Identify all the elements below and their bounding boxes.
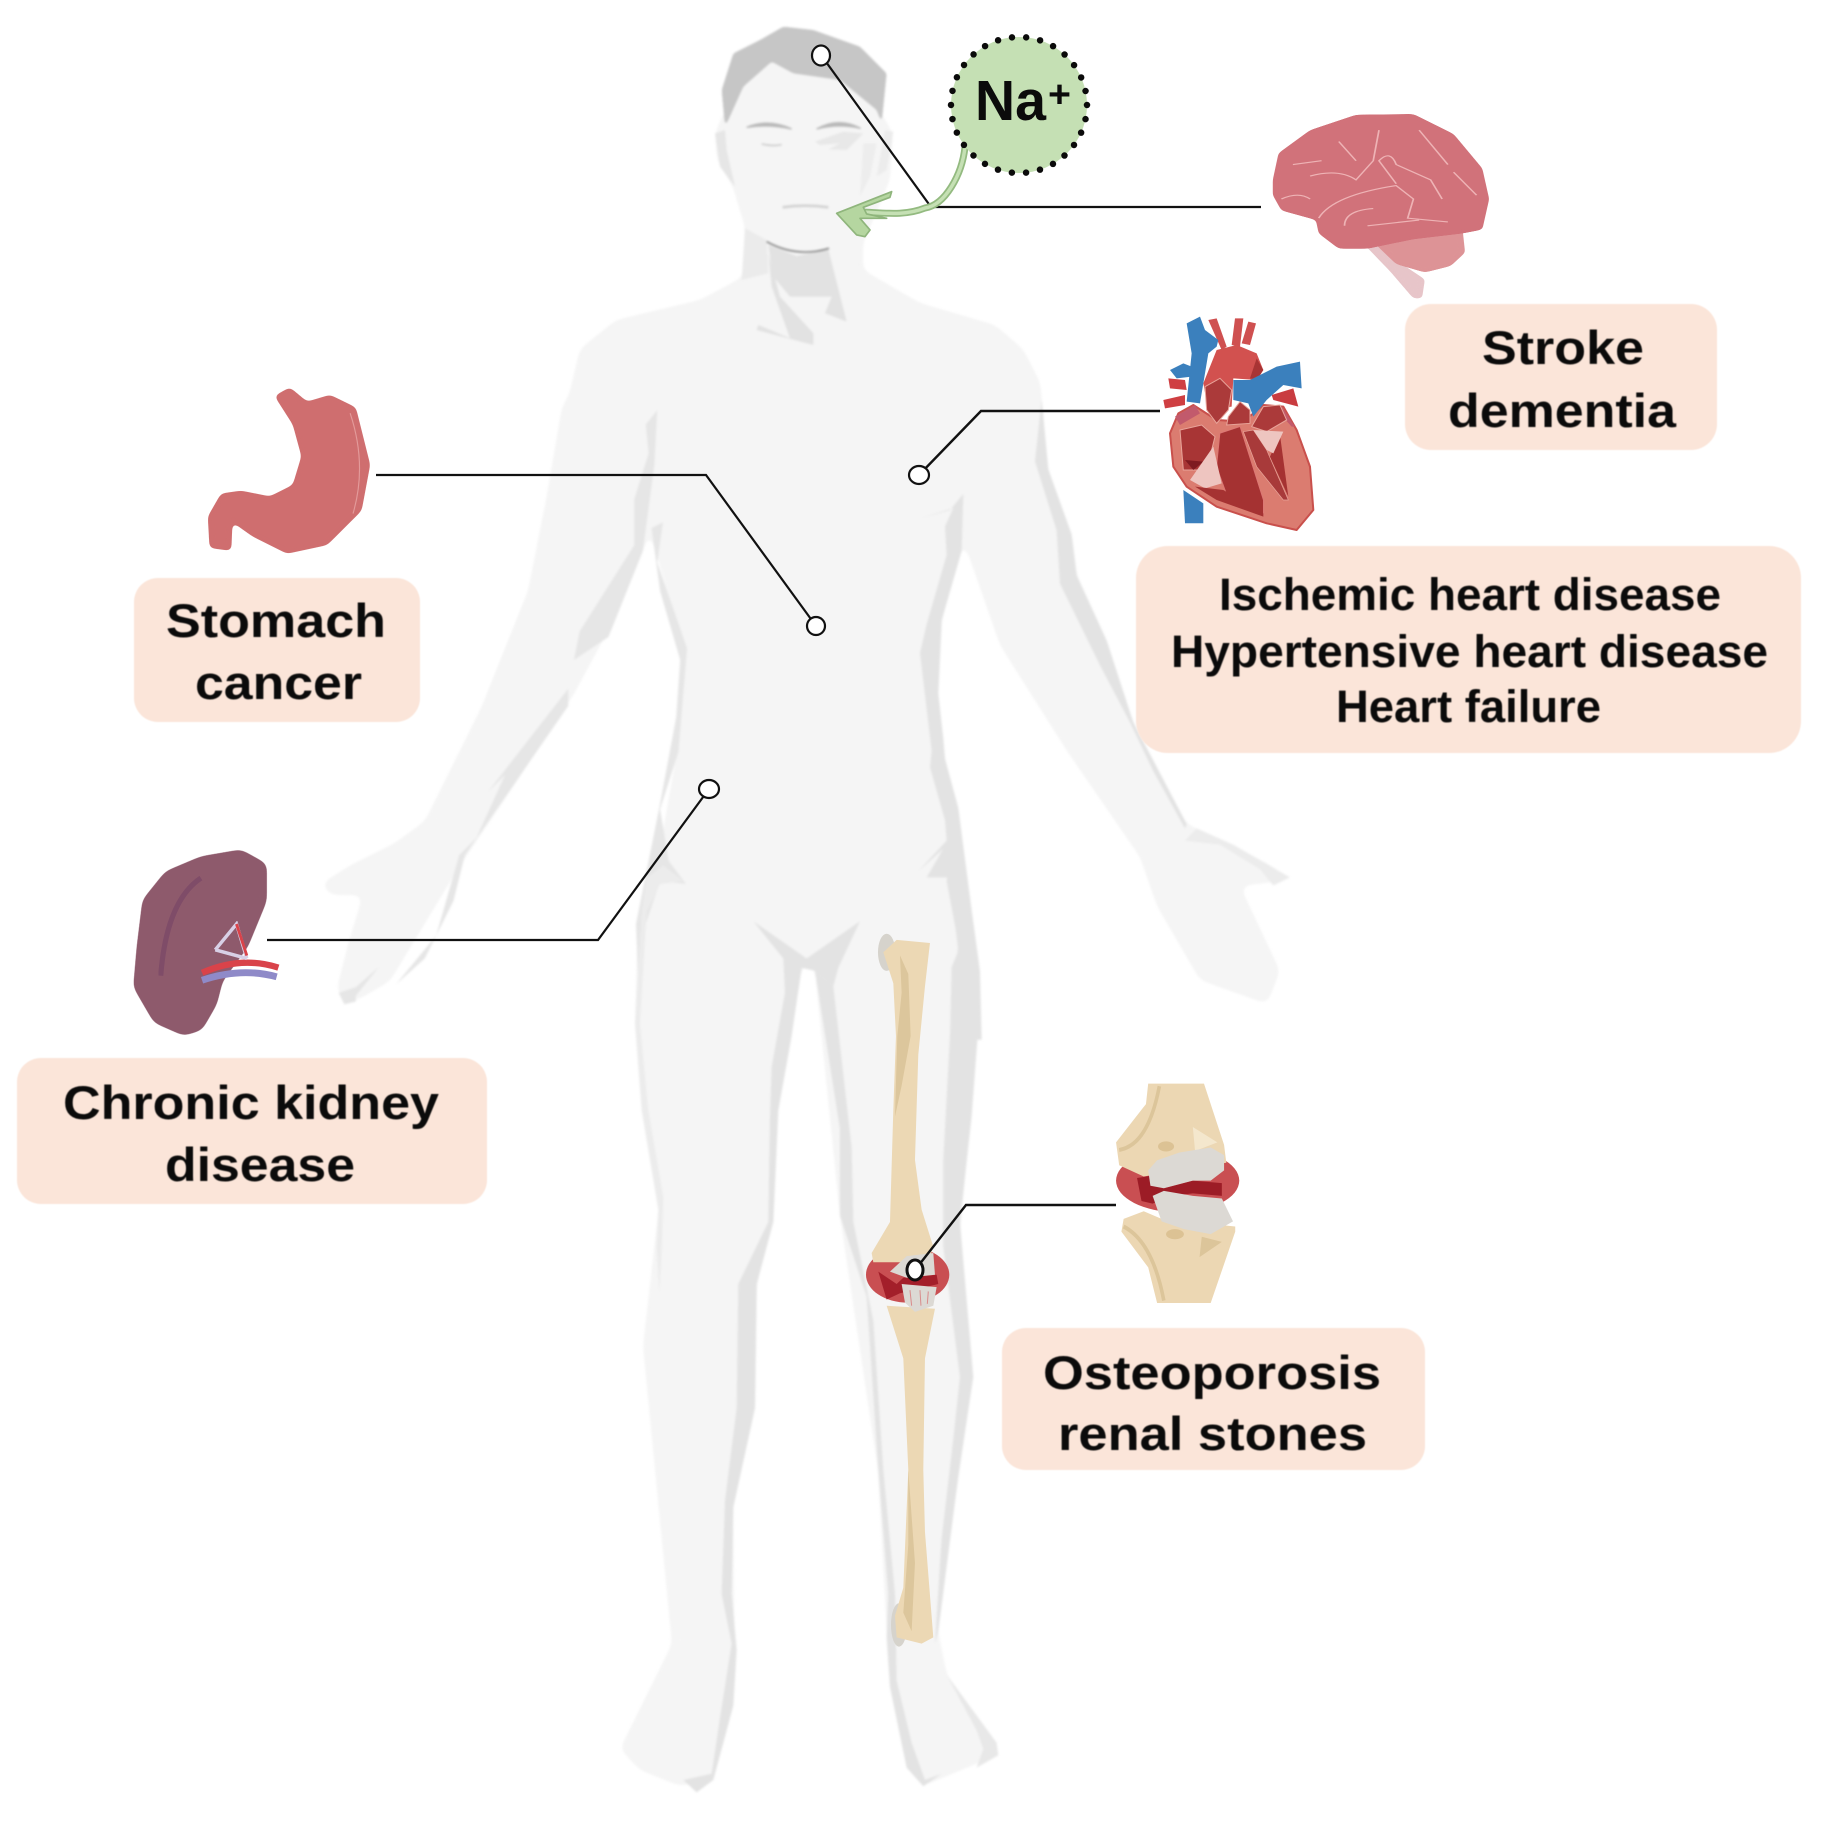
connector: kidney — [267, 789, 709, 940]
shading: left arm and torso — [339, 410, 687, 1004]
label: osteoporosis renal stones: renal stones — [1058, 1407, 1367, 1460]
label: stomach cancer: Stomach — [166, 594, 386, 647]
label: chronic kidney disease: disease — [165, 1138, 355, 1191]
label: stroke dementia: Stroke — [1482, 321, 1644, 374]
marker: head — [812, 46, 830, 66]
shading: right arm and torso — [918, 400, 1290, 1040]
label: heart diseases: Heart failure — [1336, 681, 1601, 732]
label: stomach cancer — [134, 578, 420, 722]
label: stroke dementia: dementia — [1448, 384, 1677, 437]
connector: head to brain — [821, 55, 1261, 207]
icon: arthritic joint — [1116, 1084, 1239, 1303]
label: heart diseases: Ischemic heart disease — [1219, 569, 1721, 620]
label: osteoporosis renal stones: Osteoporosis — [1043, 1346, 1381, 1399]
leg bones with arthritic knee — [866, 934, 949, 1647]
connector: stomach — [376, 475, 816, 626]
icon: stomach — [208, 387, 370, 554]
label: heart diseases — [1136, 546, 1801, 753]
connector: knee — [915, 1205, 1116, 1270]
label: osteoporosis renal stones — [1002, 1328, 1425, 1470]
connector: heart — [919, 411, 1160, 475]
label: stroke dementia — [1405, 304, 1717, 450]
icon: kidney — [133, 849, 278, 1036]
human body silhouette — [321, 27, 1290, 1792]
marker: heart — [909, 466, 929, 484]
icon: brain — [1273, 114, 1489, 299]
sodium ion badge: Na — [975, 69, 1047, 133]
icon: heart — [1163, 317, 1313, 530]
inflamed joint detail — [878, 1253, 938, 1312]
shading: legs — [635, 850, 998, 1792]
head hair and face — [715, 27, 893, 345]
label: stomach cancer: cancer — [195, 656, 362, 709]
sodium ion badge — [951, 37, 1087, 173]
label: chronic kidney disease — [17, 1058, 487, 1204]
sodium ion badge: + — [1048, 74, 1071, 116]
marker: kidney — [699, 780, 719, 798]
marker: knee — [907, 1260, 923, 1280]
sodium arrow into mouth — [837, 147, 965, 237]
marker: stomach — [807, 617, 825, 635]
label: chronic kidney disease: Chronic kidney — [63, 1076, 439, 1129]
label: heart diseases: Hypertensive heart disease — [1171, 626, 1768, 677]
